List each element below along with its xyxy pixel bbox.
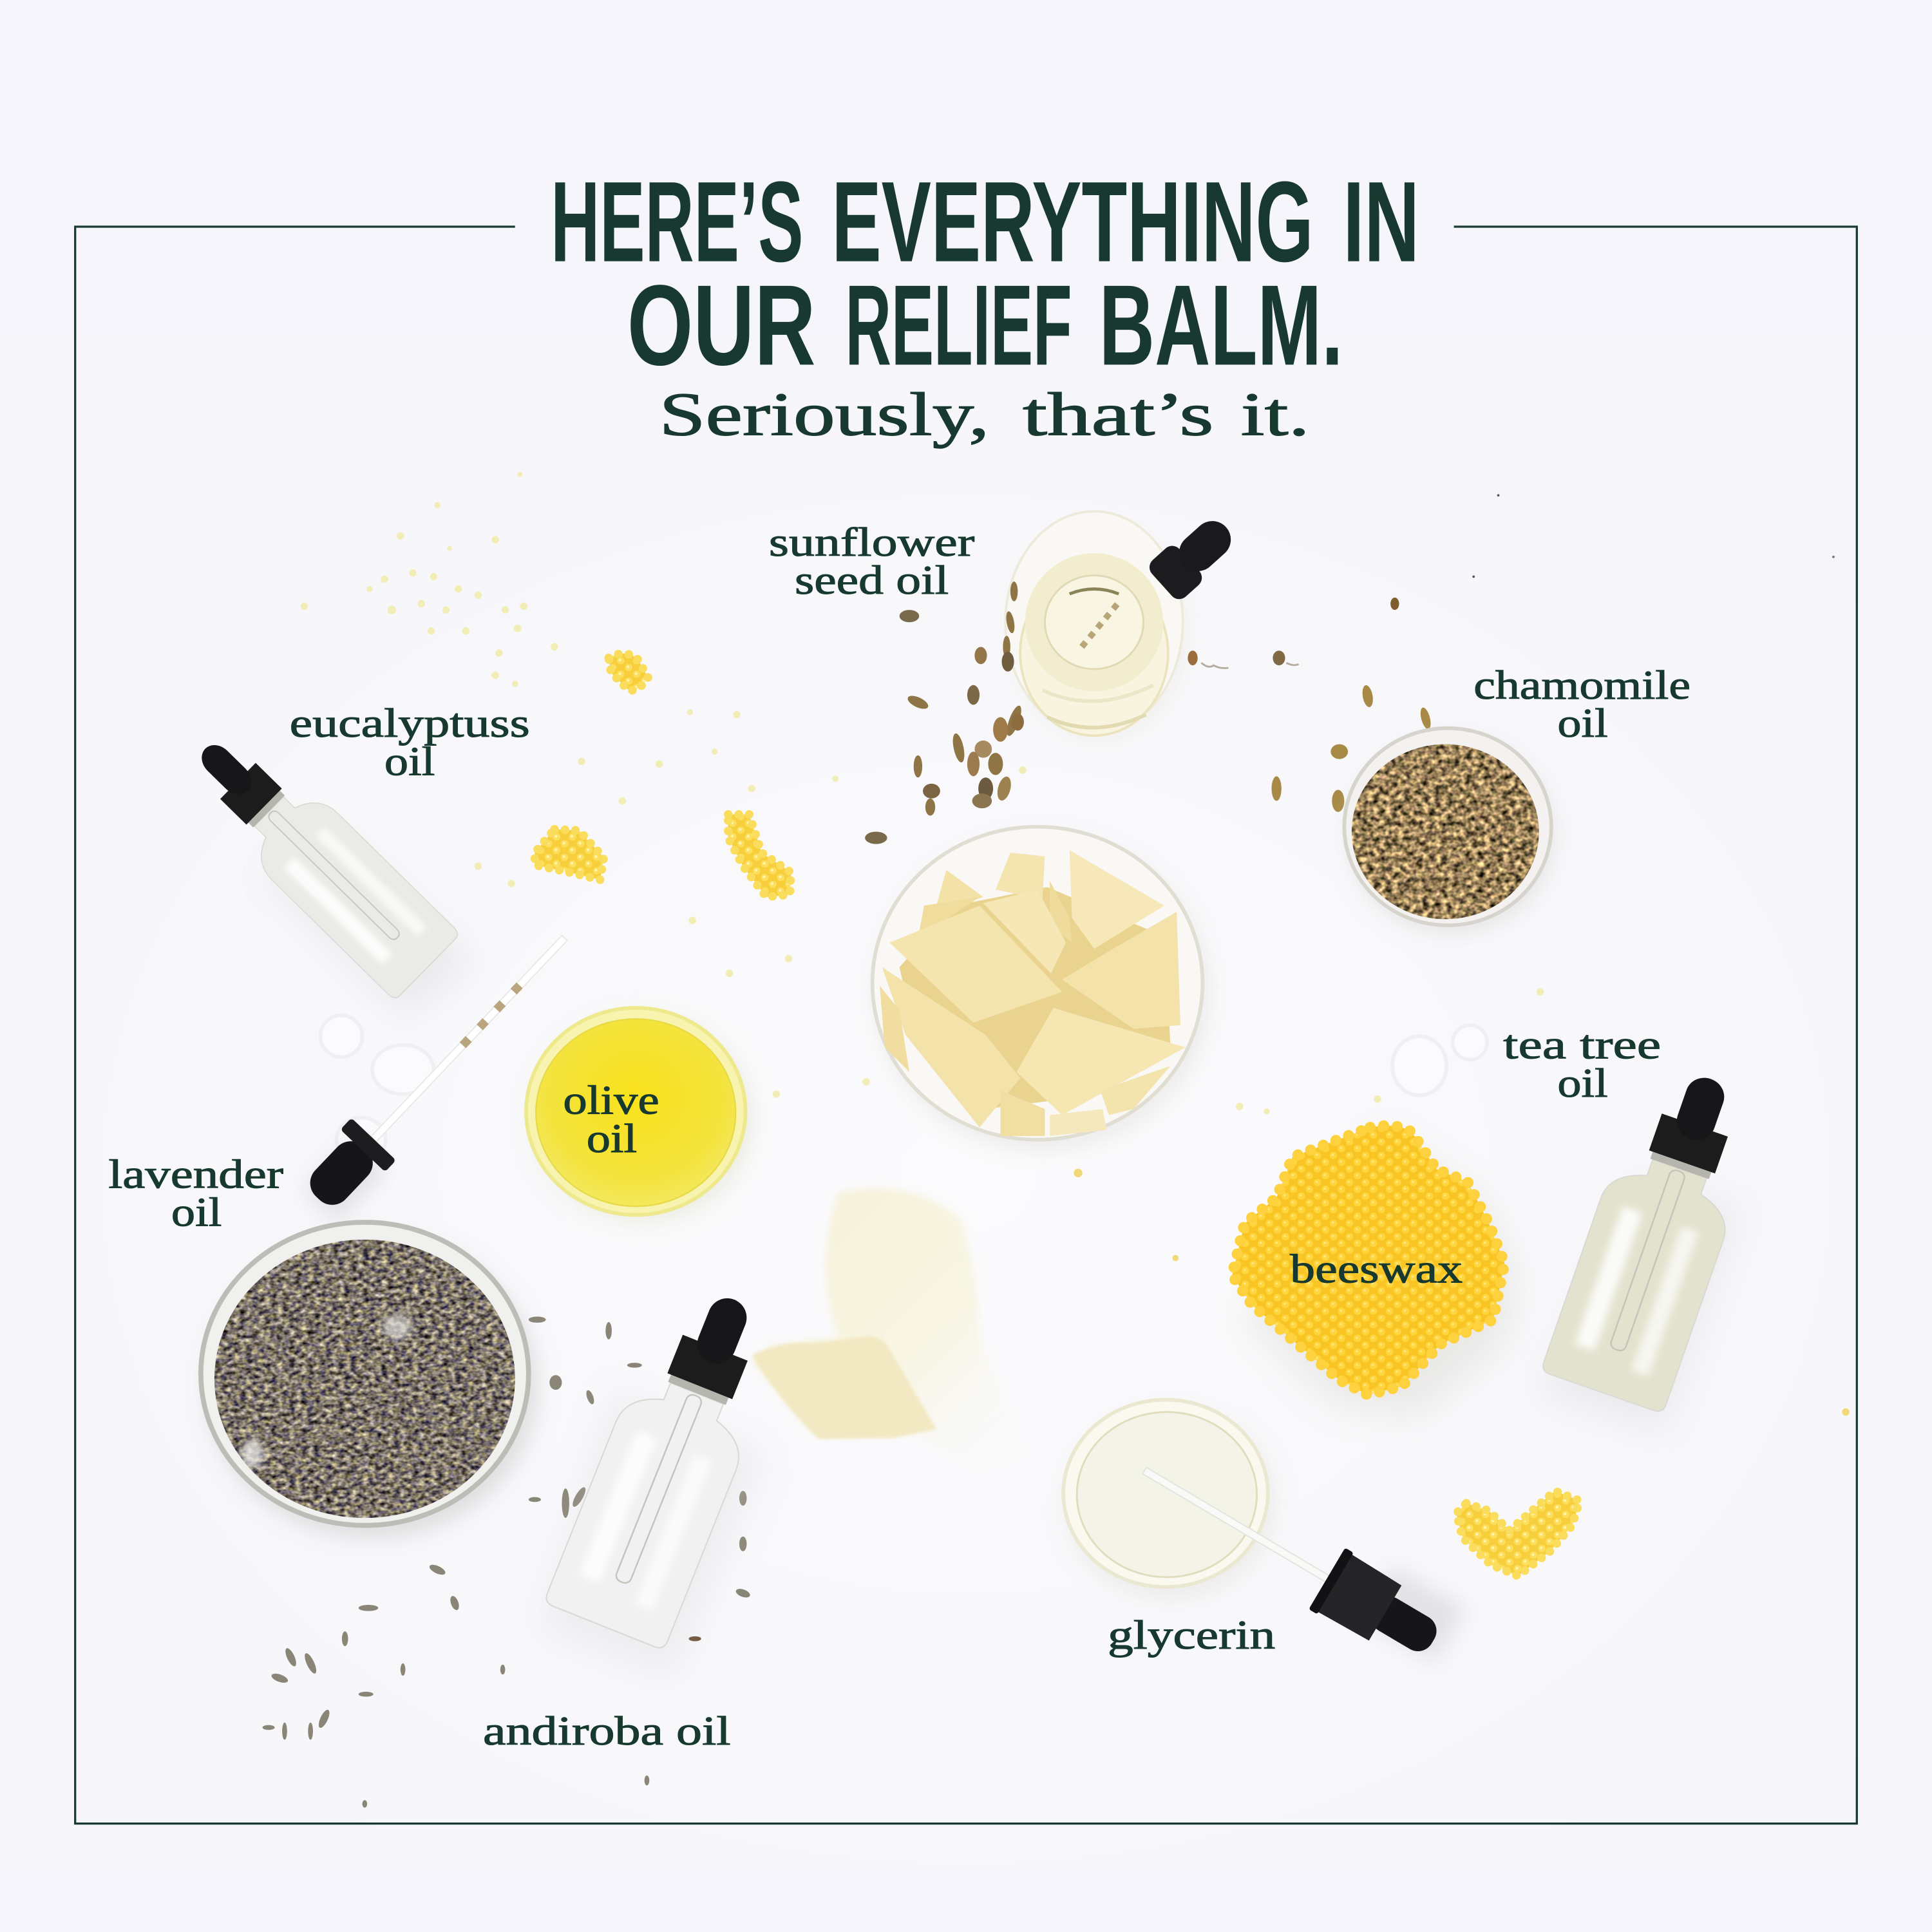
honeycomb sheet: beeswax bbox=[1232, 1126, 1518, 1417]
lavender bud scatter bbox=[263, 1316, 751, 1808]
chamomile flower bits bbox=[1271, 494, 1835, 812]
label: tea tree oil: tea tree bbox=[1503, 1022, 1661, 1067]
label: olive oil bbox=[563, 1078, 659, 1161]
subtitle: that’s bbox=[1023, 380, 1214, 448]
title: HERE’S bbox=[551, 158, 803, 286]
honeycomb piece: top small bbox=[609, 654, 648, 690]
label: sunflower seed oil bbox=[769, 520, 974, 603]
title: EVERYTHING bbox=[831, 158, 1314, 286]
dropper: glycerin pipette bbox=[1126, 1432, 1466, 1678]
subtitle bbox=[659, 380, 1310, 448]
cocoa butter chunks bbox=[880, 850, 1186, 1136]
dropper bottle: eucalyptus oil bbox=[173, 715, 475, 1016]
label: lavender oil bbox=[108, 1151, 283, 1235]
dropper bottle: tea tree oil bbox=[1540, 1057, 1772, 1429]
label: eucalyptuss oil: eucalyptuss bbox=[290, 701, 530, 746]
title: IN bbox=[1343, 158, 1419, 286]
title bbox=[551, 158, 1419, 389]
title: BALM. bbox=[1099, 261, 1343, 389]
honeycomb piece: centre strip bbox=[728, 815, 791, 897]
label: andiroba oil: andiroba oil bbox=[483, 1709, 731, 1754]
petri dish: lavender buds bbox=[201, 1222, 538, 1539]
subtitle: Seriously, bbox=[659, 380, 989, 448]
sunflower seeds bbox=[865, 582, 1299, 844]
icon: beaker dropper bulb bbox=[1146, 509, 1242, 603]
scattered pale beeswax beads bbox=[301, 472, 1850, 1416]
dropper: lavender oil pipette bbox=[292, 917, 588, 1224]
label: lavender oil: oil bbox=[171, 1190, 222, 1235]
label: glycerin: glycerin bbox=[1108, 1613, 1275, 1658]
honeycomb piece: left bbox=[535, 829, 604, 880]
label: eucalyptuss oil: oil bbox=[384, 739, 435, 784]
petri dish: glycerin bbox=[1063, 1399, 1275, 1599]
label: tea tree oil bbox=[1503, 1022, 1661, 1106]
petri dish: cocoa butter bbox=[873, 827, 1210, 1151]
label: tea tree oil: oil bbox=[1557, 1061, 1608, 1106]
frame bbox=[75, 227, 1857, 1824]
title: RELIEF bbox=[845, 261, 1072, 389]
petri dish: olive oil bbox=[526, 1008, 754, 1222]
glass beaker: sunflower seed oil bbox=[1005, 511, 1186, 739]
petri dish: chamomile bbox=[1344, 728, 1555, 934]
subtitle: it. bbox=[1241, 380, 1310, 448]
label: olive oil: olive bbox=[563, 1078, 659, 1123]
title: OUR bbox=[627, 261, 816, 389]
label: chamomile oil: oil bbox=[1557, 701, 1608, 746]
label: beeswax: beeswax bbox=[1290, 1247, 1463, 1292]
balm swatch and smear bbox=[752, 1188, 1029, 1466]
label: chamomile oil bbox=[1473, 663, 1690, 746]
label: sunflower seed oil: seed oil bbox=[795, 558, 949, 603]
label: olive oil: oil bbox=[587, 1116, 637, 1161]
honeycomb piece: lower right heart bbox=[1456, 1491, 1580, 1576]
label: eucalyptuss oil bbox=[290, 701, 530, 784]
dropper bottle: andiroba oil bbox=[542, 1276, 795, 1676]
label: sunflower seed oil: sunflower bbox=[769, 520, 974, 565]
faint water droplets bbox=[320, 1016, 1487, 1162]
label: chamomile oil: chamomile bbox=[1473, 663, 1690, 708]
label: lavender oil: lavender bbox=[108, 1151, 283, 1197]
